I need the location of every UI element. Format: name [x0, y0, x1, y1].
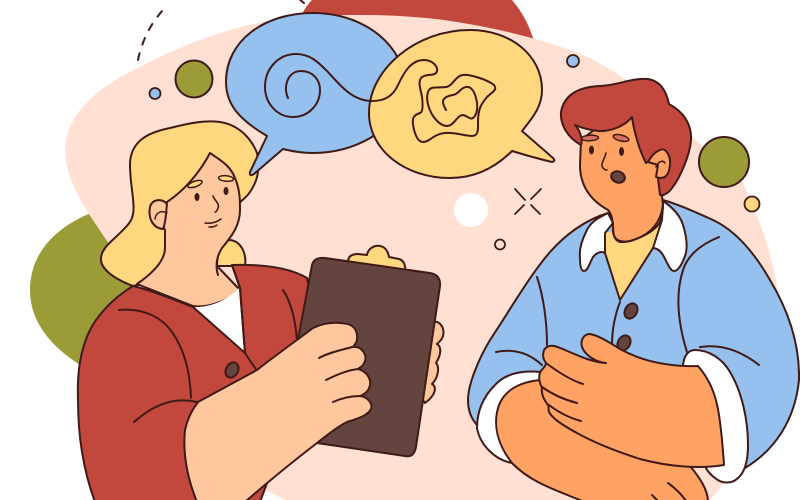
woman: back hair — [217, 240, 245, 266]
woman: nose — [213, 196, 218, 212]
woman: jacket — [78, 265, 320, 500]
man: upper arm and hand — [539, 334, 724, 467]
dashed arc — [138, 5, 168, 60]
yellow speech bubble — [369, 30, 554, 178]
woman: neck shadow line — [217, 262, 218, 275]
man: right cuff — [683, 350, 748, 482]
small blue circle left — [150, 88, 160, 99]
woman: neck and face — [137, 153, 240, 306]
man — [468, 79, 799, 500]
tangled thought line — [265, 54, 495, 142]
woman: arm and hand — [184, 323, 371, 500]
woman: eyebrow right — [218, 175, 234, 182]
blue speech bubble — [226, 13, 398, 175]
man: lower hand finger lines — [652, 483, 687, 500]
man: button top — [622, 301, 640, 321]
woman: eye left — [194, 193, 200, 201]
man: eye left — [589, 146, 594, 154]
man: shirt — [468, 200, 799, 468]
man: eyebrow right — [613, 133, 629, 143]
small yellow circle right — [744, 196, 760, 212]
man: collar left — [580, 213, 613, 271]
man: collar right — [653, 201, 687, 271]
man: eyebrow left — [581, 135, 599, 141]
man: nose — [602, 153, 607, 170]
woman: eye right — [224, 187, 228, 195]
red background shape — [302, 0, 535, 45]
olive background shape — [30, 208, 140, 368]
man: ear — [648, 149, 670, 178]
clipboard — [296, 258, 440, 456]
clipboard clip — [348, 246, 405, 270]
man: shirt seams — [496, 237, 759, 365]
man: inner ear — [656, 161, 665, 167]
man: left cuff — [477, 372, 545, 463]
man: eye right — [619, 147, 624, 156]
woman: eyebrows — [187, 179, 203, 189]
man: lower arm — [496, 380, 708, 500]
man: neck line — [613, 203, 663, 242]
man: V neck edges — [605, 248, 653, 300]
small blue circle top right — [567, 55, 579, 67]
woman: hair — [101, 121, 258, 286]
woman: button — [223, 360, 241, 380]
olive circle left — [176, 60, 212, 98]
man: button bottom — [615, 333, 633, 353]
small white circle — [495, 240, 505, 250]
woman: fingers behind clipboard — [410, 322, 443, 403]
man: hair — [561, 79, 691, 195]
woman: finger lines — [319, 347, 360, 402]
man: finger lines — [542, 363, 583, 421]
woman — [78, 121, 443, 500]
woman: jacket seams — [119, 265, 297, 422]
dash at top edge — [298, 0, 304, 3]
woman: ear — [150, 200, 167, 229]
woman: mouth — [205, 219, 221, 227]
woman: inner ear — [155, 212, 167, 219]
man: undershirt — [605, 220, 662, 300]
olive circle right — [699, 137, 749, 187]
man: neck and face — [580, 110, 665, 242]
sparkle — [515, 189, 541, 214]
man: mouth — [610, 169, 626, 185]
white circle — [454, 193, 488, 227]
woman: white shirt — [193, 287, 245, 353]
